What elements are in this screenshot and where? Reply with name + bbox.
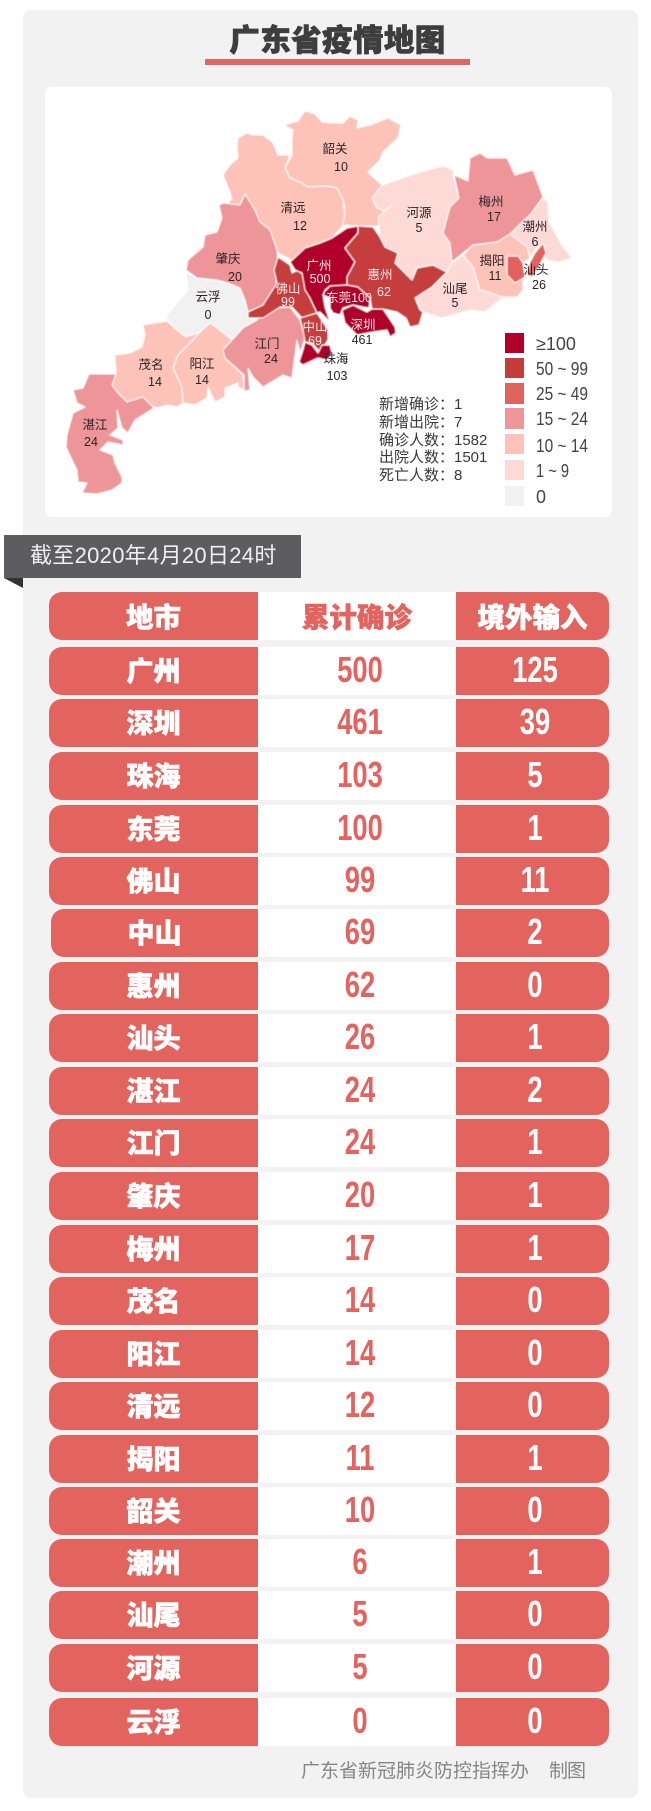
map of Guangdong with legend and stats [66, 111, 588, 507]
row: 汕尾: 汕尾 [126, 1594, 180, 1633]
row: 佛山: 99 [345, 859, 375, 900]
map labels: dark text: 茂名 [138, 357, 164, 372]
row: 阳江: 阳江 [126, 1332, 180, 1372]
row: 惠州 [49, 962, 609, 1010]
map labels: dark text [82, 141, 549, 449]
row: 潮州: 潮州 [126, 1542, 180, 1581]
map labels: dark text: 江门 [254, 336, 280, 351]
map labels: light text: 广州 [306, 259, 332, 273]
row: 肇庆: 20 [345, 1174, 375, 1215]
row: 佛山: 11 [521, 859, 550, 900]
row: 惠州: 惠州 [126, 964, 180, 1004]
map region: 揭阳 [463, 234, 530, 297]
map region: 肇庆 [186, 194, 278, 312]
map region: 茂名 [112, 321, 200, 408]
legend [505, 333, 588, 507]
summary statistics: 出院人数：1501 [379, 448, 487, 466]
row: 江门 [49, 1119, 609, 1167]
row: 河源: 5 [352, 1646, 368, 1687]
row: 云浮 [49, 1698, 609, 1746]
map labels: dark text: 20 [228, 270, 242, 284]
map region: 江门 [223, 307, 305, 391]
footer credit: 广东省新冠肺炎防控指挥办 制图 [301, 1761, 585, 1782]
map labels: dark text: 14 [195, 373, 209, 387]
row: 云浮: 0 [352, 1700, 368, 1741]
row: 韶关: 10 [345, 1489, 375, 1530]
summary statistics [379, 396, 487, 484]
row: 揭阳: 揭阳 [126, 1438, 180, 1476]
map labels: dark text: 6 [532, 235, 539, 249]
row: 韶关: 韶关 [126, 1490, 180, 1529]
map labels: dark text: 肇庆 [215, 251, 241, 266]
map labels: light text: 惠州 [367, 268, 393, 282]
row: 东莞: 东莞 [126, 808, 180, 846]
row: 河源: 0 [528, 1646, 543, 1687]
row: 东莞: 1 [528, 806, 543, 848]
row: 揭阳 [49, 1435, 609, 1483]
map labels: dark text: 17 [487, 210, 501, 224]
map labels: dark text: 阳江 [189, 357, 215, 371]
map labels: light text: 东莞100 [326, 291, 372, 305]
row: 湛江: 2 [528, 1068, 543, 1110]
map labels: dark text: 云浮 [195, 290, 221, 304]
map region: 中山 [300, 313, 328, 352]
map labels: dark text: 12 [293, 219, 307, 233]
row: 湛江: 湛江 [126, 1070, 180, 1108]
row: 广州 [49, 647, 609, 695]
map region: 广州 [290, 226, 358, 322]
table header: 地市 [126, 595, 181, 635]
row: 珠海 [49, 752, 609, 800]
row: 佛山 [49, 857, 609, 905]
row: 汕尾: 5 [352, 1593, 368, 1634]
row: 珠海: 珠海 [126, 755, 180, 794]
row: 云浮: 云浮 [126, 1701, 180, 1740]
map region: 惠州 [345, 226, 447, 327]
row: 广州: 500 [337, 649, 383, 690]
row: 东莞: 100 [337, 806, 383, 848]
map labels: dark text: 5 [416, 221, 423, 235]
row: 汕头: 汕头 [126, 1017, 180, 1056]
map labels: dark text: 0 [205, 308, 212, 322]
row: 中山: 2 [528, 911, 543, 952]
row: 深圳 [49, 699, 609, 747]
row: 汕头: 1 [528, 1016, 543, 1057]
map labels: dark text: 清远 [280, 201, 306, 215]
map labels: dark text: 梅州 [478, 194, 504, 209]
map labels: light text: 深圳 [350, 318, 376, 332]
row: 江门: 1 [528, 1121, 543, 1162]
row: 茂名: 茂名 [126, 1280, 180, 1319]
map region: 佛山 [248, 257, 317, 318]
row: 中山: 69 [345, 911, 375, 952]
summary statistics: 死亡人数：8 [379, 467, 462, 484]
legend: 25 ~ 49 [536, 384, 588, 404]
row: 清远: 0 [528, 1384, 543, 1425]
row: 河源 [49, 1644, 609, 1692]
map labels: light text: 中山 [302, 319, 328, 334]
legend: ≥100 [536, 334, 576, 354]
map region: 云浮 [166, 273, 257, 340]
row: 茂名: 0 [528, 1279, 543, 1320]
summary statistics: 确诊人数：1582 [379, 432, 487, 449]
row: 深圳: 39 [520, 701, 551, 742]
map labels: light text: 99 [281, 295, 295, 309]
row: 江门: 24 [345, 1121, 375, 1162]
row: 惠州: 0 [528, 964, 543, 1004]
legend: 1 ~ 9 [536, 461, 569, 481]
row: 佛山: 佛山 [126, 860, 180, 899]
date ribbon: 截至2020年4月20日24时 [30, 543, 277, 568]
row: 云浮: 0 [528, 1700, 543, 1741]
row: 梅州: 1 [528, 1226, 543, 1268]
row: 肇庆: 1 [528, 1174, 543, 1215]
map labels: dark text: 11 [489, 269, 502, 283]
row: 珠海: 5 [528, 754, 543, 795]
map labels: light text: 500 [310, 272, 330, 286]
row: 汕头 [49, 1014, 609, 1062]
map labels: dark text: 汕头 [523, 263, 549, 277]
row: 阳江 [49, 1330, 609, 1378]
table header [49, 592, 609, 640]
row: 汕头: 26 [345, 1016, 375, 1057]
map region: 韶关 [284, 111, 401, 226]
row: 阳江: 0 [528, 1332, 543, 1372]
map labels: dark text: 24 [264, 352, 278, 366]
map labels: light text: 69 [308, 334, 322, 348]
row: 肇庆 [49, 1172, 609, 1220]
row: 肇庆: 肇庆 [126, 1175, 180, 1214]
map labels: dark text: 河源 [406, 206, 432, 220]
row: 广州: 广州 [126, 650, 180, 689]
row: 清远 [49, 1382, 609, 1430]
map labels: dark text: 461 [352, 333, 372, 347]
row: 揭阳: 1 [528, 1436, 543, 1478]
map labels: dark text: 103 [327, 369, 347, 383]
row: 汕尾: 0 [528, 1593, 543, 1634]
row: 东莞 [49, 805, 609, 853]
map region: 湛江 [66, 374, 154, 494]
map regions [66, 111, 572, 494]
map region: 珠海 [299, 342, 332, 365]
row: 梅州 [49, 1225, 609, 1273]
row: 茂名: 14 [345, 1279, 375, 1320]
summary statistics: 新增确诊：1 [379, 396, 462, 413]
row: 茂名 [49, 1277, 609, 1325]
row: 广州: 125 [513, 649, 558, 690]
row: 河源: 河源 [126, 1647, 180, 1686]
row: 潮州: 1 [528, 1541, 543, 1582]
map region: 梅州 [443, 153, 543, 262]
map region: 汕尾 [415, 255, 502, 318]
row: 深圳: 深圳 [126, 702, 180, 741]
table header: 累计确诊 [302, 595, 412, 635]
map region: 汕头 [507, 243, 546, 283]
row: 清远: 清远 [126, 1385, 180, 1424]
map labels: dark text: 珠海 [323, 351, 349, 366]
map labels: dark text: 湛江 [82, 418, 108, 432]
row: 潮州: 6 [352, 1541, 368, 1582]
legend: 10 ~ 14 [536, 436, 588, 456]
map labels: dark text: 潮州 [522, 219, 548, 234]
row: 惠州: 62 [345, 964, 375, 1004]
date ribbon [4, 535, 301, 578]
legend: 15 ~ 24 [536, 409, 588, 429]
map region: 深圳 [342, 305, 396, 337]
map labels: light text: 62 [377, 285, 391, 299]
ribbon fold [4, 578, 23, 588]
map labels: light text [275, 259, 393, 348]
map labels: dark text: 汕尾 [442, 282, 468, 296]
row: 清远: 12 [345, 1384, 375, 1425]
row: 潮州 [49, 1539, 609, 1587]
title: 广东省疫情地图 [229, 16, 446, 60]
legend: 0 [536, 487, 546, 507]
row: 湛江: 24 [345, 1068, 375, 1110]
map labels: dark text: 韶关 [322, 141, 348, 156]
title underline [205, 59, 470, 65]
map card [45, 87, 612, 517]
map labels: dark text: 26 [532, 278, 546, 292]
row: 梅州: 梅州 [126, 1228, 180, 1266]
row: 珠海: 103 [337, 754, 383, 795]
row: 中山 [51, 909, 609, 957]
row: 汕尾 [49, 1591, 609, 1639]
row: 阳江: 14 [345, 1332, 375, 1372]
map labels: light text: 佛山 [275, 282, 301, 296]
map labels: dark text: 14 [148, 375, 162, 389]
map region: 清远 [223, 133, 345, 261]
row: 揭阳: 11 [346, 1436, 374, 1478]
row: 深圳: 461 [337, 701, 383, 742]
row: 韶关: 0 [528, 1489, 543, 1530]
row: 湛江 [49, 1067, 609, 1115]
row: 韶关 [49, 1487, 609, 1535]
map region: 潮州 [510, 198, 572, 262]
row: 梅州: 17 [345, 1226, 375, 1268]
legend: 50 ~ 99 [536, 359, 588, 379]
map labels: dark text: 5 [452, 296, 459, 310]
table header: 境外输入 [478, 595, 588, 635]
summary statistics: 新增出院：7 [379, 413, 462, 431]
map labels: dark text: 10 [334, 160, 348, 174]
map region: 河源 [372, 166, 459, 280]
map region: 东莞 [323, 285, 370, 315]
map labels: dark text: 揭阳 [479, 253, 505, 268]
map region: 阳江 [173, 323, 244, 405]
row: 江门: 江门 [126, 1122, 180, 1161]
row: 中山: 中山 [128, 912, 182, 951]
map labels: dark text: 24 [84, 435, 98, 449]
